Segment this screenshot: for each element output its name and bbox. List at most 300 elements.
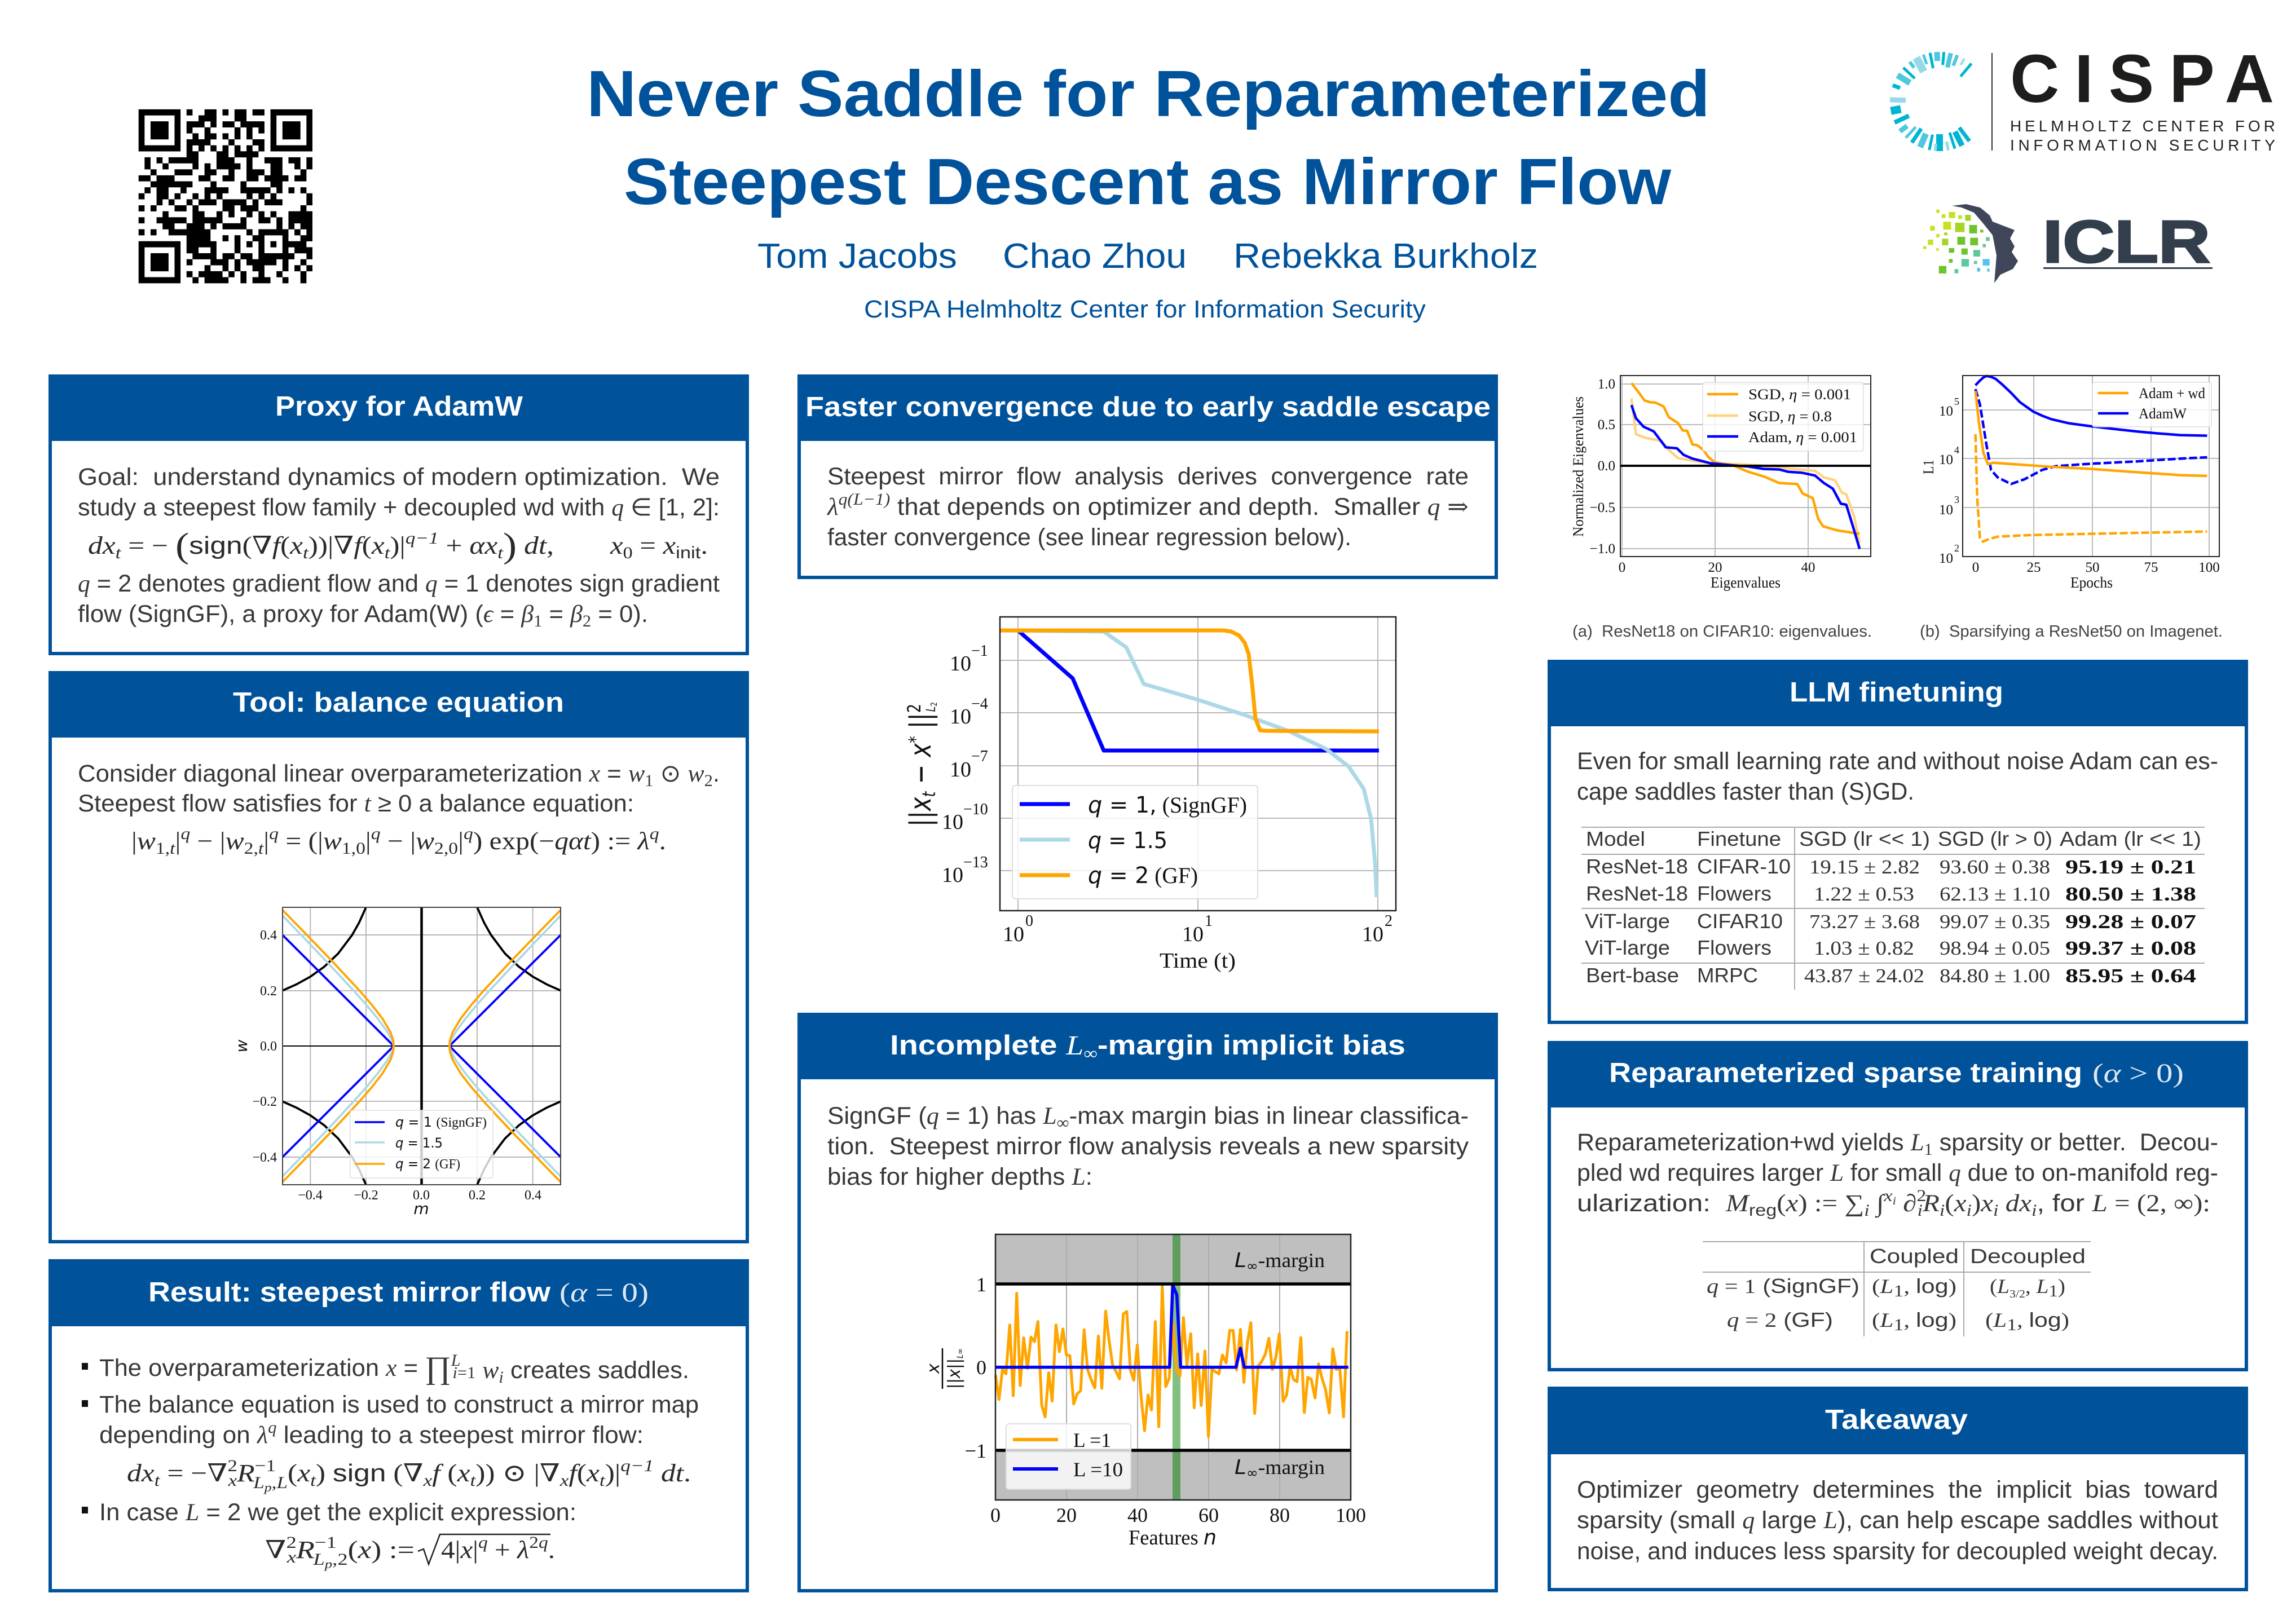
text block: goal and flow equation: f(x	[354, 532, 382, 559]
text block: L1 sparsity: i	[1917, 1201, 1923, 1220]
chart: ResNet18 eigenvalues: −0.5	[1590, 500, 1615, 515]
text block: sparsity bias: -max margin bias in linear classifica-	[1069, 1102, 1469, 1129]
chart: margins across features: ||x||	[945, 1358, 964, 1389]
text block: goal and flow equation: =	[542, 601, 570, 628]
chart: convergence over time: 10	[950, 652, 971, 676]
chart: convergence over time: 10	[942, 810, 963, 834]
results table: 43.87 ± 24.02	[1804, 965, 1924, 987]
bullet list: In case L = 2 we get the explicit expression:	[99, 1499, 576, 1526]
chart: convergence over time: −13	[963, 854, 988, 871]
captions for charts a and b	[1572, 623, 2223, 641]
heading: Result steepest mirror flow: (α = 0)	[559, 1278, 649, 1308]
text block: convergence rate: q(L−1)	[839, 490, 890, 509]
text block: balance equation: w	[323, 827, 342, 855]
text block: L1 sparsity: ularization: M	[1577, 1190, 1746, 1217]
bullet list: ∇	[265, 1536, 283, 1564]
chart: ResNet50 sparsity: 25	[2027, 560, 2041, 575]
text block: balance equation: 2	[704, 771, 713, 790]
chart: convergence over time: 10	[1362, 923, 1383, 946]
sparsity table: log )	[1916, 1274, 1955, 1298]
chart: ResNet18 eigenvalues: 0.0	[1598, 458, 1615, 474]
bullet list: 2	[287, 1533, 297, 1552]
sparsity table: q = 2 (GF)	[1727, 1308, 1833, 1331]
text block: goal and flow equation: +	[439, 532, 469, 559]
bullet list: x	[559, 1471, 569, 1490]
sparsity table: ,	[1903, 1309, 1916, 1331]
text block: balance equation: Steepest flow satisfies for t ≥ 0 a balance equation:	[78, 790, 634, 817]
text block: goal and flow equation: =	[633, 532, 663, 559]
text block: convergence rate: faster convergence (see linear regression below).	[827, 524, 1351, 551]
captions for charts a and b: (a) ResNet18 on CIFAR10: eigenvalues.	[1572, 623, 1872, 641]
results table: ResNet-18	[1586, 855, 1688, 878]
chart: ResNet18 eigenvalues: 20	[1708, 560, 1722, 575]
heading: Tool balance equation: Tool: balance equation	[233, 687, 564, 718]
results table: 84.80 ± 1.00	[1940, 965, 2050, 987]
chart: saddle curves in m-w plane: −0.4	[252, 1150, 277, 1165]
text block: L1 sparsity: (	[1777, 1190, 1786, 1217]
chart: ResNet50 sparsity: L1	[1920, 460, 1937, 474]
text block: goal and flow equation: t	[116, 544, 121, 562]
text block: takeaway: sparsity (small q large L), can help escape saddles without	[1577, 1507, 2218, 1534]
results table: Flowers	[1697, 882, 1771, 905]
results table: 19.15 ± 2.82	[1809, 856, 1920, 878]
text block: goal and flow equation: x	[663, 532, 676, 559]
text block: goal and flow equation: β	[570, 601, 583, 628]
chart: saddle curves in m-w plane: q = 1 (SignGF)	[395, 1114, 487, 1130]
bullet list: L	[451, 1351, 461, 1370]
chart: ResNet50 sparsity: Epochs	[2070, 574, 2113, 591]
bullet list: L	[312, 1550, 325, 1569]
text block: balance equation: .	[659, 827, 666, 855]
bullet list: x	[287, 1548, 297, 1566]
bullet list: 2	[227, 1457, 237, 1475]
chart: saddle curves in m-w plane: q = 2 (GF)	[395, 1156, 460, 1172]
chart: ResNet50 sparsity: 10	[1939, 404, 1953, 419]
bullet list: −1	[255, 1457, 276, 1475]
text block: balance equation: |w	[131, 827, 153, 855]
bullet list: x	[422, 1471, 433, 1490]
bullet list: ,L	[272, 1473, 288, 1492]
text block: goal and flow equation: 0	[623, 544, 633, 562]
text block: balance equation: q	[371, 824, 381, 843]
chart: convergence over time: q = 1, (SignGF)	[1088, 792, 1247, 818]
chart: ResNet50 sparsity: 75	[2144, 560, 2158, 575]
chart: margins across features: 0	[990, 1504, 1001, 1526]
chart: ResNet18 eigenvalues: 0.5	[1598, 417, 1615, 433]
logo: CISPA: HELMHOLTZ CENTER FOR	[2010, 117, 2275, 135]
chart: margins across features: x	[924, 1363, 944, 1374]
bullet list: f	[569, 1459, 581, 1487]
chart: margins across features: L	[1235, 1456, 1246, 1479]
text block: L1 sparsity: sparsity or better. Decou-	[1933, 1129, 2218, 1156]
chart: ResNet18 eigenvalues: Adam, η = 0.001	[1748, 429, 1857, 445]
chart: ResNet50 sparsity	[1920, 376, 2220, 591]
bullet list: i	[453, 1363, 457, 1382]
chart: saddle curves in m-w plane: −0.4	[298, 1188, 323, 1203]
chart: margins across features: −1	[965, 1440, 986, 1462]
authors	[757, 237, 1538, 276]
chart: convergence over time: L	[924, 707, 938, 712]
text block: Adam escapes saddles: Even for small learning rate and without noise Adam can es-	[1577, 748, 2218, 775]
text block: L1 sparsity: R	[1922, 1190, 1940, 1217]
results table: 99.28 ± 0.07	[2065, 911, 2196, 933]
text block: L1 sparsity: reg	[1749, 1201, 1777, 1220]
text block: L1 sparsity: L = (2, ∞):	[2092, 1190, 2198, 1217]
text block: goal and flow equation: dx	[88, 532, 116, 559]
chart: convergence over time: ||	[904, 713, 938, 736]
bullet list: )) ⊙ |∇	[475, 1459, 560, 1487]
chart: ResNet50 sparsity: 2	[1954, 542, 1959, 554]
bullet list: t	[470, 1471, 476, 1490]
text block: sparsity bias: SignGF (q = 1) has L	[827, 1102, 1056, 1129]
sparsity table: 1	[1893, 1316, 1903, 1334]
text block: L1 sparsity: (	[1945, 1190, 1954, 1217]
text block: L1 sparsity: pled wd requires larger L for small q due to on-manifold reg-	[1577, 1159, 2218, 1186]
chart: saddle curves in m-w plane: w	[232, 1039, 251, 1052]
text block: balance equation: q	[269, 824, 279, 843]
text block: goal and flow equation: init	[676, 544, 701, 562]
bullet list: i	[499, 1368, 504, 1387]
results table: ResNet-18	[1586, 882, 1688, 905]
chart: saddle curves in m-w plane: 0.2	[260, 984, 277, 999]
results table: Adam (lr << 1)	[2060, 827, 2201, 850]
chart: convergence over time: −10	[963, 801, 988, 818]
bullet list: ∏	[425, 1351, 451, 1385]
text block: L1 sparsity: ∂	[1896, 1190, 1916, 1217]
chart: ResNet18 eigenvalues: SGD, η = 0.8	[1748, 408, 1832, 425]
text block: L1 sparsity: i	[2031, 1201, 2037, 1220]
text block: L1 sparsity: i	[1966, 1201, 1972, 1220]
results table: ViT-large	[1585, 910, 1670, 933]
results table: 73.27 ± 3.68	[1809, 911, 1920, 933]
bullet list: sign (∇	[333, 1459, 418, 1487]
results table: Finetune	[1697, 827, 1781, 850]
results table: SGD (lr > 0)	[1938, 827, 2052, 850]
heading: Faster convergence: Faster convergence due to early saddle escape	[805, 392, 1491, 422]
chart: saddle curves in m-w plane: 0.4	[260, 928, 277, 943]
heading: Reparameterized sparse training: Reparameterized sparse training	[1609, 1058, 2082, 1088]
sparsity table: 3/2	[2009, 1288, 2025, 1300]
results table: 99.37 ± 0.08	[2065, 937, 2196, 959]
text block: L1 sparsity: )	[1972, 1190, 1981, 1217]
chart: convergence over time	[904, 617, 1396, 973]
logo: ICLR: ICLR	[2043, 209, 2210, 275]
results table: 1.22 ± 0.53	[1814, 883, 1914, 905]
bullet list: R	[236, 1459, 255, 1487]
chart: ResNet50 sparsity: 3	[1954, 494, 1959, 505]
chart: margins across features: -margin	[1258, 1456, 1325, 1479]
bullet list: f	[432, 1459, 444, 1487]
text block: goal and flow equation: )|	[390, 532, 406, 559]
chart: convergence over time: q = 2 (GF)	[1088, 863, 1198, 889]
bullet list: R	[296, 1536, 315, 1564]
chart: margins across features: -margin	[1258, 1249, 1325, 1272]
results table: CIFAR-10	[1697, 855, 1791, 878]
chart: convergence over time: 10	[1003, 923, 1024, 946]
chart: margins across features: 1	[976, 1273, 986, 1296]
text block: balance equation: q	[180, 824, 190, 843]
bullet list: =1 w	[457, 1357, 499, 1384]
heading: Incomplete L-infinity margin: Incomplete L	[890, 1030, 1081, 1061]
bullet list: creates saddles.	[504, 1357, 689, 1384]
text block: goal and flow equation: 1	[534, 612, 542, 630]
chart: convergence over time: 2	[929, 702, 939, 707]
text block: goal and flow equation: 2	[583, 612, 591, 630]
text block: balance equation: .	[713, 760, 720, 787]
sparsity table: (L	[1990, 1275, 2008, 1298]
heading: Takeaway: Takeaway	[1825, 1405, 1968, 1435]
heading: LLM finetuning: LLM finetuning	[1790, 677, 2003, 708]
text block: goal and flow equation: ))|∇	[309, 532, 354, 559]
text block: balance equation: w	[226, 827, 244, 855]
bullet list: −1	[315, 1533, 337, 1552]
bullet list: .	[548, 1536, 555, 1564]
results table: 98.94 ± 0.05	[1940, 937, 2050, 959]
sparsity table: Decoupled	[1970, 1245, 2086, 1268]
bullet list: leading to a steepest mirror flow:	[277, 1422, 644, 1449]
results table: SGD (lr << 1)	[1799, 827, 1930, 850]
chart: ResNet50 sparsity: 10	[1939, 452, 1953, 467]
text block: convergence rate	[826, 463, 1469, 551]
chart: convergence over time: 1	[1205, 912, 1213, 930]
logo: ICLR	[1923, 204, 2213, 283]
text block: goal and flow equation: x	[610, 532, 623, 559]
sparsity table: q = 1 (SignGF)	[1707, 1274, 1859, 1298]
text block: balance equation: − |	[190, 827, 226, 855]
text block: L1 sparsity: i	[1893, 1195, 1896, 1207]
text block: goal and flow equation: q = 2 denotes gradient flow and q = 1 denotes sign gradient	[78, 570, 720, 597]
poster title	[587, 57, 1710, 218]
bullet list: t	[600, 1471, 605, 1490]
text block: balance equation: − |	[381, 827, 416, 855]
logo: CISPA: CISPA	[2010, 40, 2274, 117]
chart: margins across features	[924, 1234, 1366, 1550]
bullet list: = −∇	[160, 1459, 227, 1487]
bullet list: t	[310, 1471, 316, 1490]
panel: Proxy for AdamW	[49, 374, 749, 654]
chart: saddle curves in m-w plane: 0.0	[413, 1188, 430, 1203]
bullet list: L	[253, 1473, 265, 1492]
chart: margins across features: L∞	[956, 1348, 965, 1358]
text block: balance equation: 2,t	[244, 839, 263, 858]
text block: balance equation: ) exp(−	[473, 827, 554, 855]
text block: goal and flow equation: dt,	[524, 532, 553, 559]
chart: convergence over time: −4	[971, 695, 988, 713]
chart: ResNet18 eigenvalues	[1570, 376, 1871, 591]
text block: takeaway: noise, and induces less sparsity for decoupled weight decay.	[1577, 1538, 2218, 1565]
text block: balance equation: w	[416, 827, 435, 855]
bullet list: +	[488, 1536, 517, 1564]
sparsity table: (L	[1872, 1275, 1891, 1298]
results table: 80.50 ± 1.38	[2065, 883, 2196, 905]
heading: Incomplete L-infinity margin: -margin implicit bias	[1098, 1030, 1405, 1061]
text block: balance equation: q	[650, 824, 659, 843]
chart: ResNet50 sparsity: 100	[2198, 560, 2220, 575]
chart: convergence over time: 0	[1025, 912, 1033, 930]
chart: convergence over time: q = 1.5	[1088, 828, 1167, 854]
text block: L1 sparsity: x	[1883, 1186, 1893, 1205]
chart: convergence over time: t	[918, 791, 940, 797]
chart: convergence over time: 10	[950, 758, 971, 782]
sparsity table: log )	[1916, 1308, 1955, 1331]
sparsity table: )	[2058, 1275, 2065, 1298]
text block: goal and flow equation: αx	[469, 532, 498, 559]
heading: Proxy for AdamW: Proxy for AdamW	[275, 391, 523, 422]
panel: LLM finetuning	[1548, 660, 2248, 1022]
chart: convergence over time: −	[904, 757, 938, 792]
text block: balance equation: |	[458, 827, 464, 855]
text block: goal and flow equation: Goal: understand dynamics of modern optimization. We	[78, 464, 720, 491]
chart: ResNet50 sparsity: 4	[1954, 444, 1959, 456]
bullet list: t	[155, 1471, 160, 1490]
text block: takeaway	[1577, 1476, 2218, 1565]
bullet list: depending on λ	[99, 1422, 268, 1449]
bullet list: q−1	[620, 1457, 654, 1475]
chart: ResNet18 eigenvalues: −1.0	[1590, 541, 1615, 557]
authors: Tom Jacobs	[757, 237, 957, 276]
text block: L1 sparsity: ∫	[1870, 1190, 1885, 1218]
text block: convergence rate: λ	[826, 494, 839, 520]
text block: goal and flow equation: sign	[189, 532, 243, 559]
sparsity table: 1	[2007, 1316, 2017, 1334]
text block: L1 sparsity: Reparameterization+wd yields L	[1577, 1129, 1924, 1156]
chart: saddle curves in m-w plane: −0.2	[354, 1188, 378, 1203]
heading: Reparameterized sparse training: (α > 0)	[2092, 1058, 2184, 1088]
text block: balance equation: = (|	[279, 827, 323, 855]
bullet list: ,2	[332, 1550, 348, 1569]
poster title: Steepest Descent as Mirror Flow	[624, 145, 1672, 218]
chart: margins across features: L	[1235, 1249, 1246, 1272]
logo: CISPA: INFORMATION SECURITY	[2010, 136, 2275, 154]
bullet list: )	[316, 1459, 333, 1487]
bullet list: (x	[447, 1459, 468, 1487]
chart: saddle curves in m-w plane	[232, 907, 561, 1218]
text block: takeaway: Optimizer geometry determines the implicit bias toward	[1577, 1476, 2218, 1503]
text block: goal and flow equation: q−1	[406, 529, 439, 548]
results table: 93.60 ± 0.38	[1940, 856, 2050, 878]
text block: L1 sparsity: x	[1980, 1190, 1993, 1217]
chart: margins across features: 60	[1198, 1504, 1219, 1526]
chart: ResNet18 eigenvalues: 0	[1619, 560, 1625, 575]
chart: saddle curves in m-w plane: m	[413, 1199, 429, 1218]
chart: ResNet18 eigenvalues: 40	[1801, 560, 1815, 575]
text block: convergence rate: q ⇒	[1427, 494, 1467, 520]
text block: balance equation: 1,0	[342, 839, 365, 858]
text block: balance equation: ⊙	[653, 760, 688, 787]
text block: balance equation: q	[464, 824, 473, 843]
text block: convergence rate: Steepest mirror flow analysis derives convergence rate	[827, 463, 1469, 490]
text block: Adam escapes saddles: cape saddles faster than (S)GD.	[1577, 778, 1914, 805]
chart: margins across features: 40	[1127, 1504, 1148, 1526]
chart: ResNet50 sparsity: 5	[1954, 396, 1959, 407]
sparsity table: (L	[1872, 1309, 1891, 1331]
results table: 1.03 ± 0.82	[1814, 937, 1914, 959]
text block: balance equation: 2,0	[434, 839, 458, 858]
chart: margins across features: L =10	[1073, 1458, 1123, 1481]
sparsity table: log )	[2029, 1308, 2068, 1331]
bullet list: 2q	[529, 1533, 547, 1552]
chart: convergence over time: ||x	[904, 793, 938, 827]
results table: Flowers	[1697, 936, 1771, 959]
text block: L1 sparsity: 2	[1916, 1186, 1926, 1205]
chart: saddle curves in m-w plane: 0.0	[260, 1039, 277, 1054]
panel: Incomplete L-infinity margin implicit bias	[797, 1013, 1498, 1591]
text block: Adam escapes saddles	[1577, 748, 2218, 805]
sparsity table: ,	[2017, 1309, 2029, 1331]
text block: L1 sparsity: dx	[1999, 1190, 2031, 1217]
text block: goal and flow equation: .	[700, 532, 708, 559]
panel: Faster convergence	[797, 374, 1498, 577]
poster title: Never Saddle for Reparameterized	[587, 57, 1710, 130]
text block: convergence rate: that depends on optimizer and depth. Smaller	[890, 493, 1427, 520]
results table: Model	[1586, 827, 1645, 850]
text block: goal and flow equation: t	[385, 544, 390, 562]
text block: L1 sparsity: x	[1954, 1190, 1966, 1217]
chart: convergence over time: x	[904, 743, 938, 758]
results table: MRPC	[1697, 964, 1758, 987]
chart: margins across features: ∞	[1246, 1258, 1258, 1274]
chart: margins across features: 0	[976, 1356, 986, 1379]
bullet list	[82, 1351, 699, 1571]
text block: goal and flow equation	[78, 464, 720, 630]
panel: Result steepest mirror flow	[49, 1259, 749, 1591]
text block: L1 sparsity: 1	[1924, 1140, 1933, 1159]
panel: Takeaway	[1548, 1387, 2248, 1590]
chart: saddle curves in m-w plane: −0.2	[252, 1095, 277, 1109]
chart: convergence over time: Time (t)	[1160, 949, 1236, 973]
chart: margins across features: L =1	[1073, 1429, 1111, 1451]
chart: convergence over time: *	[905, 736, 926, 743]
bullet list: )|	[605, 1459, 620, 1487]
sparsity table: (L	[1985, 1309, 2004, 1331]
chart: saddle curves in m-w plane: 0.2	[469, 1188, 486, 1203]
bullet list: x	[297, 1459, 311, 1487]
chart: saddle curves in m-w plane: q = 1.5	[395, 1135, 443, 1151]
text block: L1 sparsity	[1577, 1129, 2218, 1220]
chart: convergence over time: 2	[1385, 912, 1392, 930]
text block: L1 sparsity: i	[1940, 1201, 1945, 1220]
text block: sparsity bias: bias for higher depths L:	[827, 1163, 1092, 1190]
sparsity table: 1	[2048, 1282, 2058, 1300]
chart: ResNet50 sparsity: 10	[1939, 551, 1953, 566]
bullet list: λ	[516, 1536, 529, 1564]
logo: CISPA	[1890, 40, 2275, 154]
panel: Reparameterized sparse training	[1548, 1041, 2248, 1370]
sparsity table	[1703, 1242, 2091, 1336]
chart: ResNet50 sparsity: 0	[1972, 560, 1979, 575]
chart: ResNet18 eigenvalues: Normalized Eigenvalues	[1570, 396, 1587, 537]
text block: balance equation	[78, 760, 720, 858]
text block: goal and flow equation: study a steepest flow family + decoupled wd with q ∈ [1, 2]:	[78, 494, 720, 521]
text block: L1 sparsity: i	[1864, 1201, 1870, 1220]
chart: ResNet18 eigenvalues: 1.0	[1598, 377, 1615, 392]
bullet list: p	[263, 1480, 272, 1494]
text block: balance equation: 1	[645, 771, 653, 790]
sparsity table: ,	[1903, 1275, 1916, 1298]
bullet list: The balance equation is used to construct a mirror map	[99, 1391, 699, 1418]
authors: Chao Zhou	[1003, 237, 1187, 276]
text block: sparsity bias: ∞	[1057, 1114, 1069, 1132]
bullet list: (	[348, 1536, 358, 1564]
bullet list: dx	[127, 1459, 155, 1487]
text block: balance equation: |	[263, 827, 269, 855]
results table: CIFAR10	[1697, 910, 1783, 933]
bullet list: p	[323, 1557, 332, 1571]
authors: Rebekka Burkholz	[1233, 237, 1538, 276]
bullet list: (x	[577, 1459, 598, 1487]
sparsity table: Coupled	[1870, 1245, 1959, 1268]
captions for charts a and b: (b) Sparsifying a ResNet50 on Imagenet.	[1920, 623, 2223, 641]
